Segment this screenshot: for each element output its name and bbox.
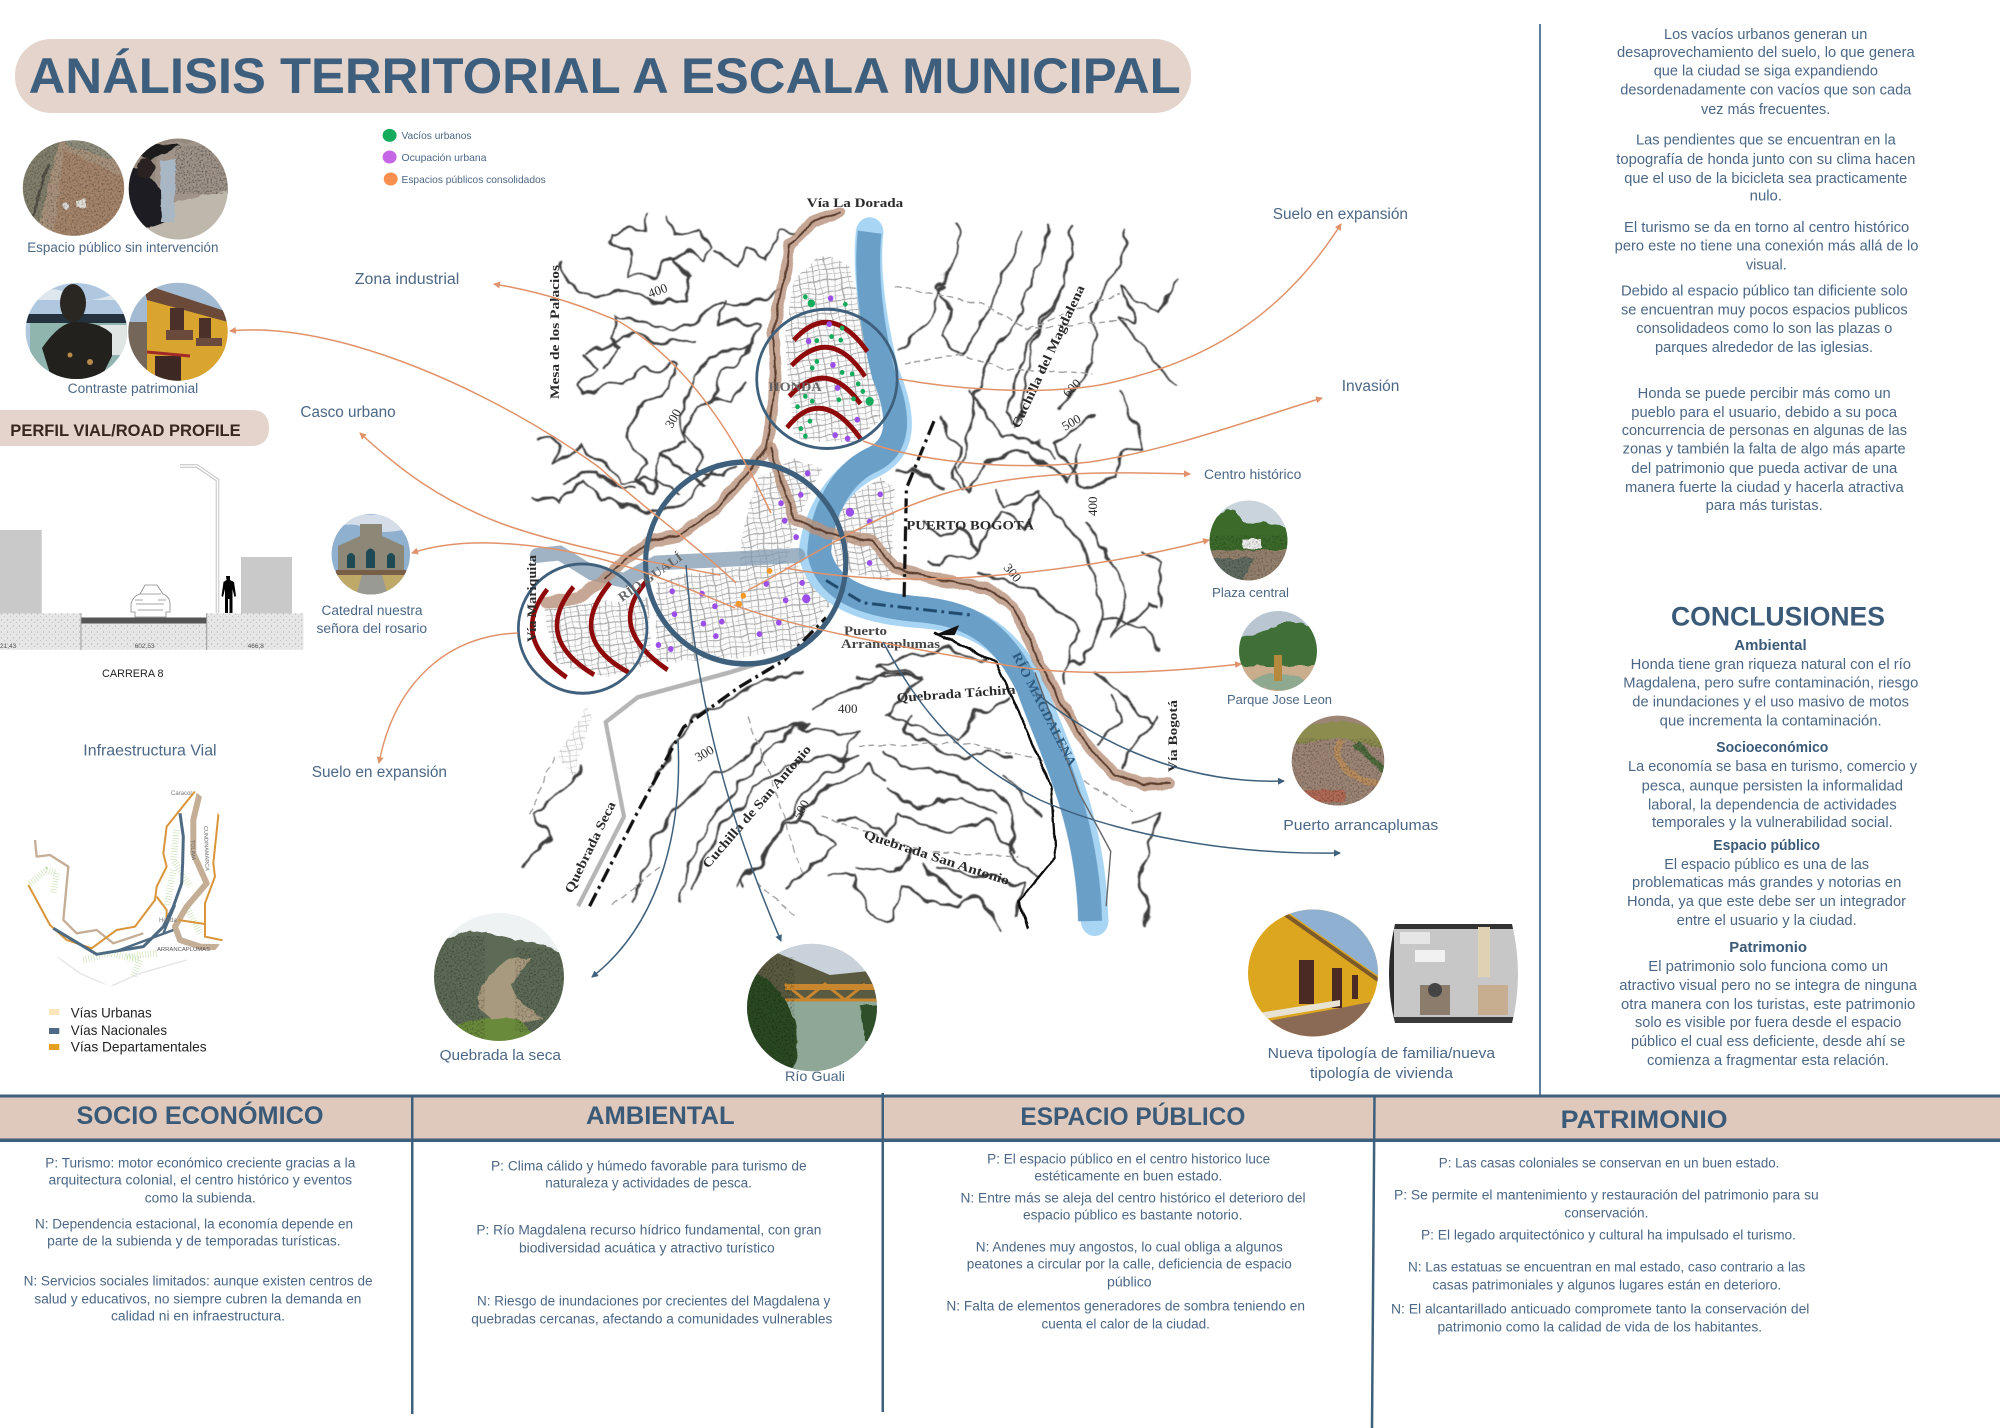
conclusion: espacio público: entre el usuario y la ciudad.: [1677, 913, 1857, 929]
paragraph: honda pueblo: Honda se puede percibir más como un: [1638, 386, 1891, 402]
map place names: 600: [1060, 376, 1084, 400]
positive: centro histórico: estéticamente en buen estado.: [1034, 1168, 1222, 1183]
map place names: HONDA: [769, 379, 822, 394]
negative: estatuas: N: Las estatuas se encuentran en mal estado, caso contrario a las: [1408, 1259, 1806, 1274]
map place names: [524, 195, 1180, 895]
negative: dependencia: N: Dependencia estacional, la economía depende en: [35, 1216, 353, 1231]
conclusion: patrimonio: solo es visible por fuera desde el espacio: [1635, 1015, 1901, 1031]
conclusion: patrimonio: comienza a fragmentar esta relación.: [1647, 1053, 1889, 1069]
paragraph: turismo: pero este no tiene una conexión más allá de lo: [1615, 239, 1918, 255]
map place names: Vía Mariquita: [524, 554, 539, 642]
paragraph: turismo: El turismo se da en torno al centro histórico: [1624, 220, 1909, 236]
heading: conclusiones: CONCLUSIONES: [1671, 601, 1885, 631]
photo group: espacio público sin intervención: [22, 138, 228, 240]
negative: deterioro: N: Entre más se aleja del centro histórico el deterioro del: [960, 1190, 1306, 1205]
road infrastructure map: CUNDINAMARCA: [202, 826, 210, 871]
paragraph: honda pueblo: pueblo para el usuario, debido a su poca: [1631, 405, 1898, 421]
conclusion: ambiental: [1623, 638, 1918, 729]
paragraph: pendientes: Las pendientes que se encuentran en la: [1636, 133, 1897, 149]
conclusion: ambiental: Ambiental: [1734, 638, 1807, 654]
positive: clima: naturaleza y actividades de pesca.: [545, 1175, 752, 1190]
positive: casas coloniales: P: Las casas coloniales se conservan en un buen estado.: [1439, 1155, 1779, 1170]
bottom header band: [0, 1093, 2000, 1428]
territorial map: [518, 195, 1180, 931]
road profile section: 21,43: [0, 643, 17, 650]
conclusion: patrimonio: [1619, 940, 1918, 1069]
conclusion: ambiental: Magdalena, pero sufre contaminación, riesgo: [1623, 675, 1918, 691]
positive: río magdalena: P: Río Magdalena recurso hídrico fundamental, con gran: [476, 1222, 821, 1237]
conclusion: socioeconómico: pesca, aunque persisten la informalidad: [1642, 778, 1903, 794]
road profile section: [0, 466, 304, 650]
gray road and rail lines: [578, 652, 794, 906]
negative: estatuas: casas patrimoniales y algunos lugares están en deterioro.: [1432, 1277, 1781, 1292]
map place names: Quebrada Seca: [561, 798, 619, 895]
map legend: Espacios públicos consolidados: [402, 174, 546, 186]
map place names: RÍO MAGDALENA: [1009, 650, 1080, 769]
conclusion: espacio público: [1627, 838, 1906, 929]
negative: sombra: cuenta el calor de la ciudad.: [1042, 1316, 1210, 1331]
map place names: Puerto: [844, 623, 887, 638]
caption: plaza central: Plaza central: [1212, 585, 1289, 600]
map place names: 300: [662, 406, 684, 430]
paragraph: vacíos urbanos: Los vacíos urbanos generan un: [1664, 27, 1867, 43]
paragraph: espacio público: [1621, 284, 1908, 356]
heading: perfil vial: [0, 410, 269, 446]
positive: turismo: [45, 1155, 356, 1205]
positive: clima: [491, 1158, 807, 1190]
espacios públicos dots: [736, 568, 772, 608]
column: patrimonio: [1391, 1106, 1819, 1334]
conclusion: espacio público: problematicas más grandes y notorias en: [1632, 875, 1901, 891]
road infrastructure map: [28, 785, 237, 987]
paragraph: honda pueblo: para más turistas.: [1706, 498, 1823, 514]
road profile section: 466,8: [248, 643, 264, 650]
map place names: Cuchilla del Magdalena: [1008, 282, 1088, 430]
paragraph: vacíos urbanos: desaprovechamiento del suelo, lo que genera: [1617, 45, 1916, 61]
paragraph: honda pueblo: manera fuerte la ciudad y hacerla atractiva: [1625, 480, 1905, 496]
legend: vías: Vías Urbanas: [71, 1004, 152, 1020]
caption: puerto arrancaplumas: Puerto arrancaplumas: [1283, 817, 1438, 834]
positive: mantenimiento: P: Se permite el mantenimiento y restauración del patrimonio para su: [1394, 1187, 1819, 1202]
street lamp: [180, 466, 218, 613]
map place names: Vía Bogotá: [1165, 699, 1180, 772]
caption: nueva tipología: [1268, 1045, 1496, 1082]
map place names: 400: [1085, 496, 1100, 516]
map place names: 400: [646, 280, 669, 301]
contour lines: [523, 214, 1175, 931]
ocupación urbana dots: [656, 295, 883, 652]
conclusion: patrimonio: público el cual ess deficiente, desde ahí se: [1631, 1034, 1905, 1050]
photos: nueva tipología: [1246, 908, 1520, 1040]
column: espacio público: ESPACIO PÚBLICO: [1020, 1101, 1245, 1131]
panel: reflexiones: [1615, 27, 1918, 514]
caption: carrera 8: CARRERA 8: [102, 668, 164, 680]
map place names: Arrancaplumas: [841, 636, 940, 651]
map labels: left side: Zona industrial: [355, 271, 459, 288]
positive: centro histórico: P: El espacio público en el centro historico luce: [987, 1151, 1270, 1166]
paragraph: honda pueblo: zonas y también la falta de algo más aparte: [1623, 442, 1906, 458]
column: patrimonio: PATRIMONIO: [1561, 1106, 1728, 1134]
map place names: Vía La Dorada: [807, 195, 904, 210]
paragraph: honda pueblo: del patrimonio que pueda activar de una: [1631, 461, 1898, 477]
column: ambiental: [471, 1102, 833, 1326]
positive: turismo: P: Turismo: motor económico creciente gracias a la: [45, 1155, 356, 1170]
map place names: 500: [790, 797, 812, 822]
photo: río guali: [747, 944, 877, 1072]
map place names: Cuchilla de San Antonio: [699, 742, 814, 871]
column: socio económico: SOCIO ECONÓMICO: [76, 1100, 324, 1130]
map place names: 300: [692, 742, 716, 765]
caption: parque jose leon: Parque Jose Leon: [1227, 692, 1332, 707]
label: casco urbano: Casco urbano: [300, 404, 396, 421]
negative: inundaciones: quebradas cercanas, afectando a comunidades vulnerables: [471, 1311, 833, 1326]
caption: espacio público sin intervención: Espacio público sin intervención: [27, 240, 219, 255]
positive: legado: P: El legado arquitectónico y cultural ha impulsado el turismo.: [1421, 1227, 1796, 1242]
road infrastructure map: Honda: [159, 918, 177, 924]
caption: quebrada la seca: Quebrada la seca: [440, 1047, 562, 1064]
conclusion: socioeconómico: [1628, 740, 1918, 831]
map place names: 300: [1001, 560, 1025, 585]
negative: deterioro: [960, 1190, 1306, 1222]
negative: estatuas: [1408, 1259, 1806, 1292]
photo: plaza central: [1210, 500, 1288, 580]
negative: sombra: [946, 1298, 1305, 1331]
paragraph: espacio público: se encuentran muy pocos espacios publicos: [1621, 303, 1908, 319]
negative: dependencia: [35, 1216, 353, 1248]
negative: servicios: [24, 1273, 373, 1323]
conclusion: socioeconómico: La economía se basa en turismo, comercio y: [1628, 759, 1918, 775]
heading: perfil vial: PERFIL VIAL/ROAD PROFILE: [10, 422, 241, 440]
río magdalena: [812, 232, 1095, 921]
urban fabric: [544, 255, 895, 777]
conclusion: espacio público: Espacio público: [1713, 838, 1820, 854]
map place names: PUERTO BOGOTÁ: [906, 518, 1035, 533]
conclusion: ambiental: que incrementa la contaminación.: [1660, 713, 1882, 729]
negative: servicios: calidad ni en infraestructura.: [111, 1308, 285, 1323]
negative: alcantarillado: [1391, 1301, 1809, 1334]
paragraph: pendientes: topografía de honda junto con su clima hacen: [1616, 152, 1915, 168]
column: socio económico: [24, 1100, 373, 1323]
label: centro histórico: Centro histórico: [1204, 467, 1301, 482]
road infrastructure map: Caracol: [171, 791, 192, 797]
negative: dependencia: parte de la subienda y de temporadas turísticas.: [47, 1233, 341, 1248]
paragraph: espacio público: parques alrededor de las iglesias.: [1655, 340, 1873, 356]
paragraph: vacíos urbanos: desordenadamente con vacíos que son cada: [1620, 83, 1912, 99]
person: [222, 576, 236, 613]
paragraph: turismo: visual.: [1746, 258, 1787, 274]
right column divider: [1539, 24, 1541, 1095]
arrows: orange connectors: [230, 224, 1341, 763]
analysis circles: [518, 309, 897, 693]
negative: deterioro: espacio público es bastante notorio.: [1023, 1207, 1242, 1222]
conclusion: socioeconómico: Socioeconómico: [1716, 740, 1828, 756]
negative: andenes: [967, 1239, 1292, 1289]
paragraph: vacíos urbanos: vez más frecuentes.: [1701, 102, 1830, 118]
paragraph: vacíos urbanos: [1617, 27, 1916, 118]
map place names: 500: [1059, 411, 1083, 434]
column: ambiental: AMBIENTAL: [586, 1102, 735, 1130]
paragraph: pendientes: [1616, 133, 1915, 205]
negative: andenes: peatones a circular por la calle, deficiencia de espacio: [967, 1256, 1292, 1271]
paragraph: espacio público: Debido al espacio público tan dificiente solo: [1621, 284, 1908, 300]
map legend: [383, 129, 546, 186]
road infrastructure map: TOLIMA: [189, 840, 196, 861]
conclusion: patrimonio: Patrimonio: [1729, 940, 1807, 956]
positive: río magdalena: biodiversidad acuática y atractivo turístico: [519, 1240, 775, 1255]
caption: catedral: señora del rosario: [316, 621, 427, 636]
panel: conclusiones: [1619, 601, 1918, 1069]
negative: servicios: salud y educativos, no siempre cubren la demanda en: [34, 1291, 361, 1306]
negative: inundaciones: N: Riesgo de inundaciones por crecientes del Magdalena y: [477, 1293, 831, 1308]
road infrastructure map: ARRANCAPLUMAS: [157, 947, 210, 953]
legend: vías: [49, 1004, 207, 1055]
paragraph: espacio público: consolidadeos como lo son las plazas o: [1636, 321, 1892, 337]
red arcs: [532, 322, 867, 677]
map place names: 400: [838, 701, 858, 716]
paragraph: turismo: [1615, 220, 1918, 274]
positive: mantenimiento: conservación.: [1564, 1205, 1648, 1220]
negative: andenes: N: Andenes muy angostos, lo cual obliga a algunos: [976, 1239, 1283, 1254]
map place names: Quebrada Táchira: [896, 682, 1016, 705]
negative: sombra: N: Falta de elementos generadores de sombra teniendo en: [946, 1298, 1305, 1313]
negative: inundaciones: [471, 1293, 833, 1326]
paragraph: pendientes: que el uso de la bicicleta sea practicamente: [1624, 171, 1907, 187]
map legend: Ocupación urbana: [402, 152, 487, 164]
photo: puerto arrancaplumas: [1292, 716, 1384, 806]
paragraph: honda pueblo: [1622, 386, 1907, 514]
label: suelo en expansión izquierda: Suelo en expansión: [312, 764, 447, 781]
legend: vías: Vías Nacionales: [71, 1022, 167, 1038]
photo: parque jose leon: [1239, 611, 1317, 691]
caption: catedral: Catedral nuestra: [322, 603, 423, 618]
negative: alcantarillado: N: El alcantarillado anticuado compromete tanto la conservación del: [1391, 1301, 1809, 1316]
car: [131, 585, 170, 617]
conclusion: patrimonio: otra manera con los turistas, este patrimonio: [1621, 997, 1915, 1013]
negative: alcantarillado: patrimonio como la calidad de vida de los habitantes.: [1438, 1319, 1762, 1334]
positive: turismo: como la subienda.: [145, 1190, 256, 1205]
label: invasión: Invasión: [1342, 378, 1399, 395]
photo: catedral: [330, 514, 412, 596]
caption: catedral: [316, 603, 427, 636]
conclusion: ambiental: de inundaciones y el uso masivo de motos: [1632, 694, 1909, 710]
positive: río magdalena: [476, 1222, 821, 1255]
photo group: contraste patrimonial: [24, 282, 229, 382]
vacíos urbanos dots: [795, 294, 874, 439]
positive: clima: P: Clima cálido y húmedo favorable para turismo de: [491, 1158, 807, 1173]
positive: turismo: arquitectura colonial, el centro histórico y eventos: [48, 1172, 352, 1187]
caption: río guali: Río Guali: [785, 1068, 845, 1084]
column: espacio público: [946, 1101, 1306, 1331]
caption: nueva tipología: Nueva tipología de familia/nueva: [1268, 1045, 1496, 1062]
conclusion: espacio público: Honda, ya que este debe ser un integrador: [1627, 894, 1906, 910]
photo: quebrada la seca: [434, 913, 564, 1041]
map place names: RÍO GUALÍ: [615, 549, 685, 604]
map place names: Mesa de los Palacios: [547, 265, 562, 399]
map place names: Quebrada San Antonio: [862, 827, 1011, 888]
conclusion: socioeconómico: laboral, la dependencia de actividades: [1648, 797, 1897, 813]
paragraph: pendientes: nulo.: [1750, 189, 1782, 205]
conclusion: ambiental: Honda tiene gran riqueza natural con el río: [1631, 657, 1911, 673]
conclusion: espacio público: El espacio público es una de las: [1664, 857, 1869, 873]
paragraph: vacíos urbanos: que la ciudad se siga expandiendo: [1654, 64, 1878, 80]
positive: centro histórico: [987, 1151, 1270, 1183]
legend: vías: Vías Departamentales: [71, 1039, 207, 1055]
conclusion: patrimonio: atractivo visual pero no se integra de ninguna: [1619, 978, 1918, 994]
title: ANÁLISIS TERRITORIAL A ESCALA MUNICIPAL: [29, 48, 1181, 104]
paragraph: honda pueblo: concurrencia de personas en algunas de las: [1622, 423, 1907, 439]
negative: andenes: público: [1107, 1274, 1152, 1289]
caption: nueva tipología: tipología de vivienda: [1310, 1065, 1454, 1082]
positive: mantenimiento: [1394, 1187, 1819, 1220]
conclusion: socioeconómico: temporales y la vulnerabilidad social.: [1652, 815, 1893, 831]
caption: contraste patrimonial: Contraste patrimonial: [68, 381, 198, 396]
arrows: blue connectors: [592, 565, 1340, 977]
road profile section: 602,53: [135, 643, 155, 650]
labels: right of map: Suelo en expansión: [1273, 206, 1408, 223]
road bands: [537, 553, 798, 580]
negative: servicios: N: Servicios sociales limitados: aunque existen centros de: [24, 1273, 373, 1288]
conclusion: patrimonio: El patrimonio solo funciona como un: [1648, 959, 1888, 975]
dashed contours: [528, 287, 1134, 916]
heading: infraestructura vial: Infraestructura Vial: [83, 743, 217, 760]
map legend: Vacíos urbanos: [402, 130, 472, 142]
